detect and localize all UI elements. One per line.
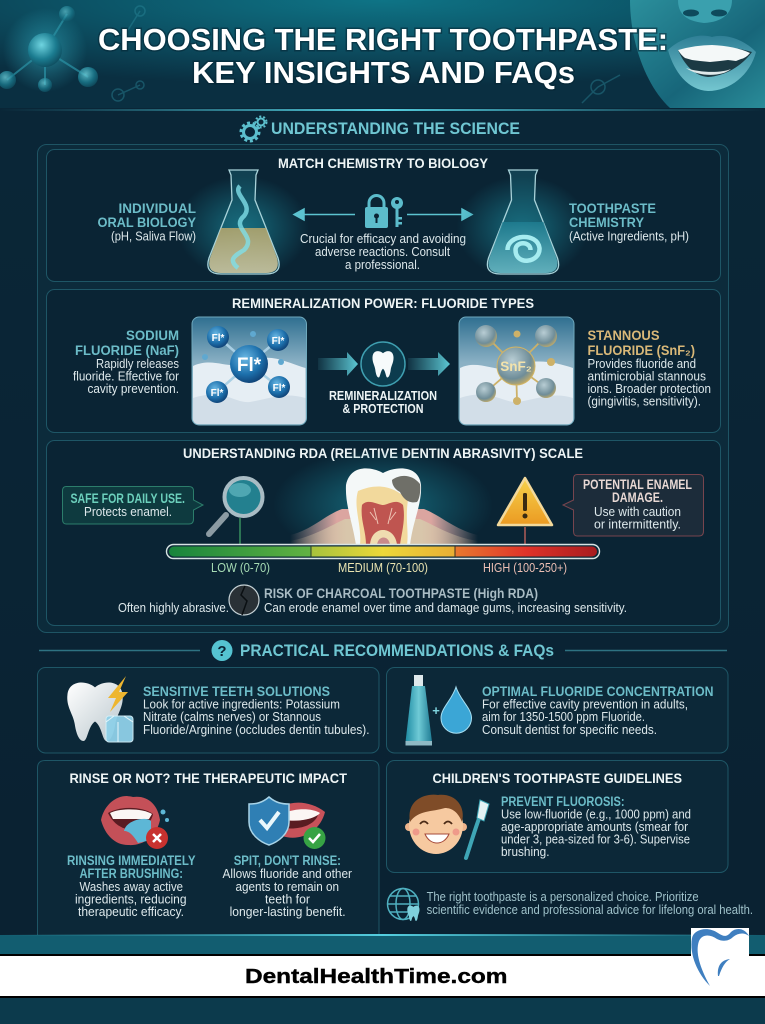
text: optimal fluoride <box>482 684 714 737</box>
panel: optimal fluoride <box>386 668 728 753</box>
panel: RDA scale <box>46 440 720 626</box>
panel: rinse or not <box>38 760 379 935</box>
text: rinsing immediately: Washes away active <box>80 880 183 894</box>
callout: potential enamel damage: Use with caution <box>594 505 681 519</box>
label: toothpaste chemistry: TOOTHPASTE <box>569 201 656 216</box>
label: individual oral biology <box>98 201 196 244</box>
scale labels: LOW (0-70) <box>211 560 270 575</box>
section heading: understanding the science: UNDERSTANDING THE SCIENCE <box>271 120 520 138</box>
label: stannous fluoride: ions. Broader protection <box>588 382 711 396</box>
icon: question mark <box>212 640 232 661</box>
image: sodium fluoride molecule: Fl* <box>211 388 223 399</box>
text: rinsing immediately: RINSING IMMEDIATELY <box>67 853 196 868</box>
section heading: understanding the science <box>241 116 520 141</box>
text: prevent fluorosis: age-appropriate amounts (smear for <box>501 820 688 834</box>
icon: tube and drop: + <box>432 703 440 718</box>
label: toothpaste chemistry: CHEMISTRY <box>569 215 644 230</box>
label: sodium fluoride: fluoride. Effective for <box>73 370 179 384</box>
arrow: left <box>294 209 355 220</box>
text: spit, don't rinse: agents to remain on <box>236 880 339 894</box>
scale labels: HIGH (100-250+) <box>483 560 567 575</box>
icon: smiling child with toothbrush <box>405 795 489 858</box>
label: stannous fluoride <box>588 328 711 408</box>
label: sodium fluoride: Rapidly releases <box>96 357 179 371</box>
heading: UNDERSTANDING RDA (RELATIVE DENTIN ABRASIVITY) SCALE <box>183 446 583 461</box>
scale labels: MEDIUM (70-100) <box>338 560 428 575</box>
text: spit, don't rinse: Allows fluoride and other <box>222 867 352 881</box>
icon: globe with tooth <box>388 888 420 921</box>
text: spit, don't rinse: longer-lasting benefit. <box>230 905 346 919</box>
title <box>98 22 668 90</box>
label: stannous fluoride: STANNOUS <box>588 328 660 343</box>
title: CHOOSING THE RIGHT TOOTHPASTE: <box>98 22 668 57</box>
crucial note: Crucial for efficacy and avoiding <box>300 232 466 246</box>
icon: tooth with bolt and ice <box>67 676 133 742</box>
label: stannous fluoride: Provides fluoride and <box>588 357 696 371</box>
label: stannous fluoride: antimicrobial stannous <box>588 370 706 384</box>
image: stannous fluoride molecule <box>459 317 574 425</box>
footer <box>0 928 765 1024</box>
icon: molecule cluster <box>0 6 620 103</box>
charcoal risk text <box>118 586 627 615</box>
text: spit, don't rinse <box>222 853 352 919</box>
illustration: smiling face <box>630 0 765 108</box>
text: rinsing immediately <box>67 853 196 919</box>
icon: tooth badge <box>361 342 405 386</box>
website name: DentalHealthTime.com <box>245 965 508 988</box>
text: rinsing immediately: AFTER BRUSHING: <box>80 866 183 881</box>
heading: REMINERALIZATION POWER: FLUORIDE TYPES <box>232 296 534 311</box>
image: sodium fluoride molecule <box>192 317 306 425</box>
crucial note <box>300 232 466 272</box>
icon: charcoal cracked tooth <box>229 585 259 615</box>
image: sodium fluoride molecule: Fl* <box>212 333 224 344</box>
charcoal risk text: Often highly abrasive. <box>118 601 229 615</box>
text: prevent fluorosis: Use low-fluoride (e.g., 1000 ppm) and <box>501 808 691 822</box>
label: individual oral biology: (pH, Saliva Flow) <box>111 230 196 244</box>
charcoal risk text: Can erode enamel over time and damage gums, increasing sensitivity. <box>264 601 627 615</box>
label: remineralization: REMINERALIZATION <box>329 389 437 403</box>
callout: safe for daily use <box>62 486 203 524</box>
title: KEY INSIGHTS AND FAQs <box>192 55 575 90</box>
scale labels <box>211 560 567 575</box>
closing note with globe <box>388 888 753 921</box>
image: sodium fluoride molecule: Fl* <box>272 336 284 347</box>
closing note with globe: The right toothpaste is a personalized choice. Prioritize <box>427 890 699 904</box>
text: prevent fluorosis <box>501 794 691 859</box>
text: rinsing immediately: therapeutic efficacy. <box>78 905 184 919</box>
callout: potential enamel damage: POTENTIAL ENAMEL <box>583 477 692 492</box>
illustration: tooth cross-section <box>273 449 493 561</box>
arrow: right <box>407 209 472 220</box>
label: individual oral biology: INDIVIDUAL <box>118 201 196 216</box>
icon: magnifying glass <box>209 478 262 534</box>
text: optimal fluoride: OPTIMAL FLUORIDE CONCENTRATION <box>482 684 714 699</box>
icon: rinsing mouth <box>101 796 169 849</box>
label: sodium fluoride: cavity prevention. <box>88 382 179 396</box>
header banner <box>0 0 765 108</box>
section heading: practical recommendations <box>39 640 727 661</box>
panel: children's toothpaste <box>386 760 728 872</box>
text: sensitive teeth: Look for active ingredients: Potassium <box>143 698 340 712</box>
callout: potential enamel damage: DAMAGE. <box>612 490 663 505</box>
charcoal risk text: RISK OF CHARCOAL TOOTHPASTE (High RDA) <box>264 586 538 601</box>
arrow: from tooth <box>408 352 450 376</box>
label: toothpaste chemistry: (Active Ingredients, pH) <box>569 230 689 244</box>
text: spit, don't rinse: teeth for <box>265 892 310 906</box>
panel: fluoride types <box>46 290 720 432</box>
logo: blue tooth <box>691 928 749 986</box>
section heading: practical recommendations: PRACTICAL RECOMMENDATIONS & FAQs <box>240 642 554 660</box>
callout: potential enamel damage <box>563 474 704 536</box>
icon: warning triangle <box>498 478 552 525</box>
image: stannous fluoride molecule: SnF₂ <box>500 359 532 374</box>
flask: toothpaste chemistry <box>456 170 588 280</box>
icon: tube and drop <box>406 675 472 746</box>
label: sodium fluoride <box>73 328 179 396</box>
crucial note: adverse reactions. Consult <box>315 245 450 259</box>
text: sensitive teeth <box>143 684 370 737</box>
crucial note: a professional. <box>345 258 420 272</box>
heading: CHILDREN'S TOOTHPASTE GUIDELINES <box>432 771 682 786</box>
panel: match chemistry to biology <box>46 150 720 282</box>
label: sodium fluoride: SODIUM <box>126 328 179 343</box>
label: individual oral biology: ORAL BIOLOGY <box>98 215 196 230</box>
text: optimal fluoride: Consult dentist for specific needs. <box>482 723 657 737</box>
text: sensitive teeth: Nitrate (calms nerves) or Stannous <box>143 710 321 724</box>
image: sodium fluoride molecule: Fl* <box>237 355 262 376</box>
label: toothpaste chemistry <box>569 201 689 244</box>
panel: science outer frame <box>38 144 728 632</box>
heading: MATCH CHEMISTRY TO BIOLOGY <box>278 156 488 171</box>
text: prevent fluorosis: brushing. <box>501 845 550 859</box>
heading: RINSE OR NOT? THE THERAPEUTIC IMPACT <box>70 771 348 786</box>
label: remineralization <box>329 389 437 416</box>
arrow: to tooth <box>318 352 358 376</box>
text: prevent fluorosis: PREVENT FLUOROSIS: <box>501 794 624 809</box>
text: sensitive teeth: SENSITIVE TEETH SOLUTIONS <box>143 684 330 699</box>
text: prevent fluorosis: under 3, pea-sized for 3-6). Supervise <box>501 832 690 846</box>
label: remineralization: & PROTECTION <box>342 402 424 416</box>
icon: question mark: ? <box>217 643 227 660</box>
icon: shield and smile <box>249 797 326 849</box>
text: sensitive teeth: Fluoride/Arginine (occludes dentin tubules). <box>143 723 370 737</box>
panel: sensitive teeth <box>38 668 379 753</box>
text: optimal fluoride: aim for 1350-1500 ppm Fluoride. <box>482 710 645 724</box>
callout: safe for daily use: SAFE FOR DAILY USE. <box>70 491 185 506</box>
text: optimal fluoride: For effective cavity prevention in adults, <box>482 698 688 712</box>
icon: gears <box>241 116 266 141</box>
label: stannous fluoride: (gingivitis, sensitivity). <box>588 394 701 408</box>
label: stannous fluoride: FLUORIDE (SnF₂) <box>588 343 695 358</box>
text: spit, don't rinse: SPIT, DON'T RINSE: <box>234 853 341 868</box>
image: sodium fluoride molecule: Fl* <box>273 383 285 394</box>
callout: safe for daily use: Protects enamel. <box>84 505 172 519</box>
text: rinsing immediately: ingredients, reducing <box>75 892 187 906</box>
icon: lock and key <box>365 196 403 228</box>
flask: oral biology <box>177 170 309 280</box>
chart: RDA bar <box>166 544 600 575</box>
callout: potential enamel damage: or intermittently. <box>594 518 681 532</box>
label: sodium fluoride: FLUORIDE (NaF) <box>75 343 179 358</box>
